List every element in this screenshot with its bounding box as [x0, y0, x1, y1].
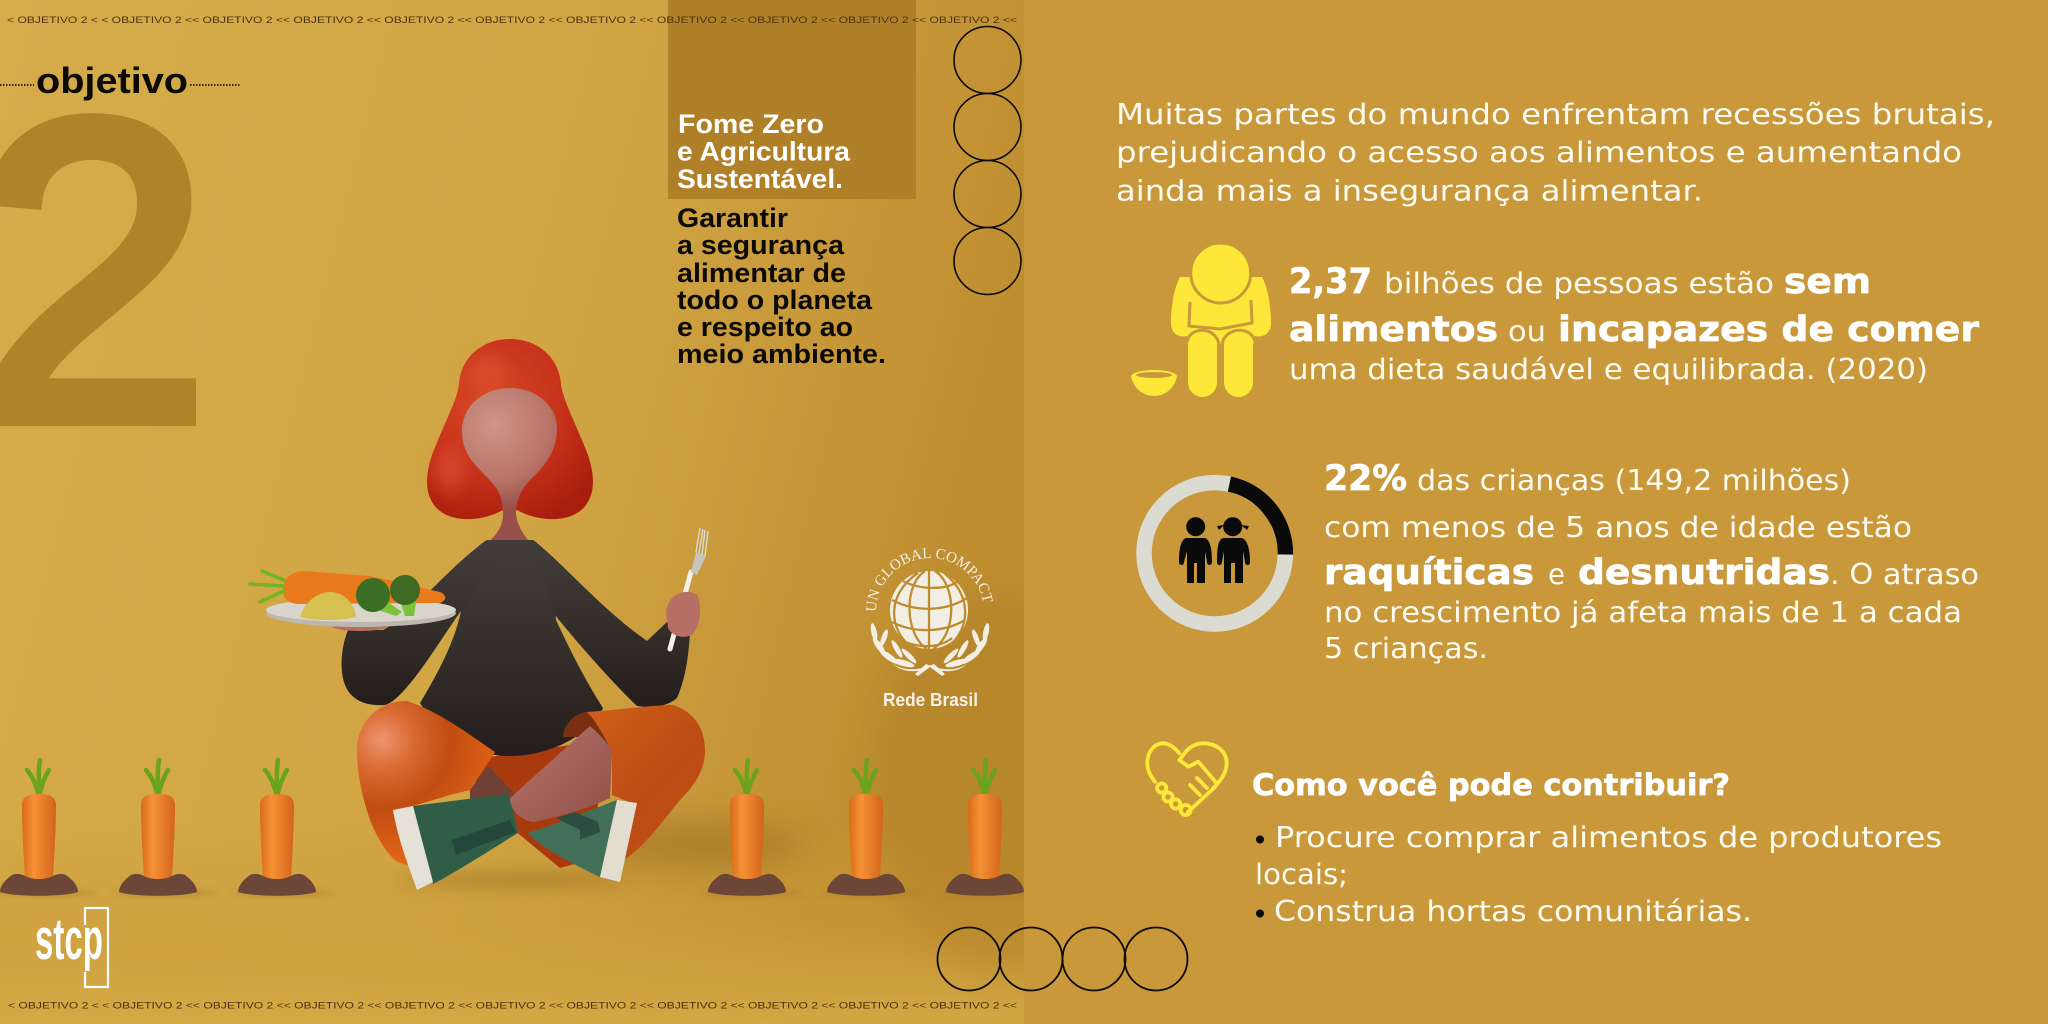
Rede Brasil: Rede Brasil	[883, 690, 978, 710]
intro text	[1116, 98, 1995, 208]
goal description: meio ambiente.	[677, 339, 886, 369]
donut chart: 22% children	[1144, 483, 1285, 624]
hair	[427, 339, 593, 519]
bullet 1: Procure comprar alimentos de produtores	[1275, 821, 1942, 854]
goal title: e Agricultura	[677, 136, 851, 166]
crotch	[470, 745, 600, 868]
globe	[890, 571, 968, 649]
bullet 2: Construa hortas comunitárias.	[1274, 895, 1752, 928]
icon: children	[1179, 517, 1250, 583]
right shoe	[527, 800, 637, 882]
wreath	[869, 623, 991, 676]
boy	[1179, 517, 1212, 583]
intro text: Muitas partes do mundo enfrentam recessões brutais,	[1116, 98, 1995, 131]
girl	[1217, 517, 1250, 583]
hand under plate	[332, 626, 388, 631]
header strip: objetivo 2 top: < OBJETIVO 2 < < OBJETIVO 2 << OBJETIVO 2 << OBJETIVO 2 << OBJETIVO 2 << OBJETIVO 2 << OBJETIVO 2 << OBJETIVO 2 << OBJETIVO 2 << OBJETIVO 2 << OBJETIVO 2 <<	[7, 15, 1017, 25]
stat: 22% children text: e	[1548, 558, 1565, 591]
stat: 2,37 billion: sem	[1784, 262, 1871, 302]
goal description: e respeito ao	[677, 312, 853, 342]
intro text: ainda mais a insegurança alimentar.	[1116, 174, 1703, 208]
stcp logo	[35, 907, 108, 987]
goal description	[677, 203, 886, 369]
stat: 22% children text: 22%	[1324, 459, 1407, 499]
left shoe	[393, 794, 518, 890]
stat: 22% children text: . O atraso	[1830, 558, 1979, 591]
left trouser leg	[357, 701, 495, 870]
stat: 2,37 billion: alimentos	[1289, 310, 1498, 350]
stat: 22% children text: no crescimento já afeta mais de 1 a cada	[1324, 596, 1962, 629]
carrot 4	[708, 758, 790, 896]
right panel background	[1024, 0, 2048, 1024]
left panel: illustration	[0, 0, 1024, 1024]
call to action heading: Como você pode contribuir?	[1252, 768, 1730, 802]
character	[250, 339, 708, 890]
stat: 22% children text	[1324, 459, 1979, 665]
stat: 22% children text: com menos de 5 anos de idade estão	[1324, 511, 1912, 544]
stat: 2,37 billion: incapazes de comer	[1558, 310, 1980, 350]
goal description: todo o planeta	[677, 285, 873, 315]
call to action	[1252, 768, 1942, 928]
carrot 2	[112, 760, 216, 896]
stat: 2,37 billion: uma dieta saudável e equilibrada. (2020)	[1289, 353, 1928, 386]
right lower leg	[510, 726, 612, 822]
carrots row	[0, 760, 1043, 896]
left branch	[869, 623, 945, 676]
logo: UN Global Compact Rede Brasil	[866, 548, 993, 706]
carrot 1	[0, 760, 97, 896]
stat: 2,37 billion: ou	[1508, 315, 1546, 348]
bullet 1	[1255, 821, 1942, 891]
bullet 1: locais;	[1255, 858, 1348, 891]
stat: 2,37 billion: bilhões de pessoas estão	[1384, 267, 1774, 300]
stat: 2,37 billion: 2,37	[1289, 262, 1372, 302]
horizontal circles	[938, 928, 1188, 990]
right trouser leg	[563, 705, 705, 860]
plate of food	[250, 571, 456, 627]
right branch	[915, 623, 991, 676]
vertical circles	[954, 26, 1021, 294]
icon: handshake heart	[1147, 743, 1227, 815]
carrot 6	[946, 758, 1024, 896]
goal title: Fome Zero	[678, 109, 824, 139]
fork	[670, 528, 708, 649]
stat: 22% children text: das crianças (149,2 milhões)	[1417, 464, 1851, 497]
goal title	[678, 114, 850, 188]
heading: objetivo: objetivo	[36, 60, 188, 101]
intro text: prejudicando o acesso aos alimentos e aumentando	[1116, 136, 1962, 169]
title box	[668, 0, 916, 199]
stat: 2,37 billion	[1289, 262, 1980, 386]
face and neck	[462, 388, 557, 541]
carrot 3	[238, 758, 328, 897]
arc text: UN GLOBAL COMPACT	[866, 548, 993, 611]
ground shadow	[395, 821, 805, 887]
carrot 5	[827, 758, 905, 896]
goal description: a segurança	[677, 230, 845, 260]
hand with fork	[666, 592, 700, 637]
icon: hungry person with bowl	[1131, 243, 1271, 397]
left lower leg	[470, 765, 514, 813]
goal title: Sustentável.	[677, 164, 843, 194]
stat: 22% children text: desnutridas	[1578, 553, 1830, 593]
stat: 22% children text: raquíticas	[1324, 553, 1534, 593]
trouser cuff opening	[563, 712, 612, 752]
stcp logo: stcp	[35, 907, 103, 972]
panel background	[0, 0, 1130, 1024]
goal description: alimentar de	[677, 258, 846, 288]
sweater	[342, 540, 690, 756]
footer strip: objetivo 2 bottom: < OBJETIVO 2 < < OBJETIVO 2 << OBJETIVO 2 << OBJETIVO 2 << OBJETIVO 2 << OBJETIVO 2 << OBJETIVO 2 << OBJETIVO 2 << OBJETIVO 2 << OBJETIVO 2 << OBJETIVO 2 <<	[8, 1000, 1017, 1010]
stat: 22% children text: 5 crianças.	[1324, 632, 1488, 665]
goal description: Garantir	[677, 203, 789, 233]
